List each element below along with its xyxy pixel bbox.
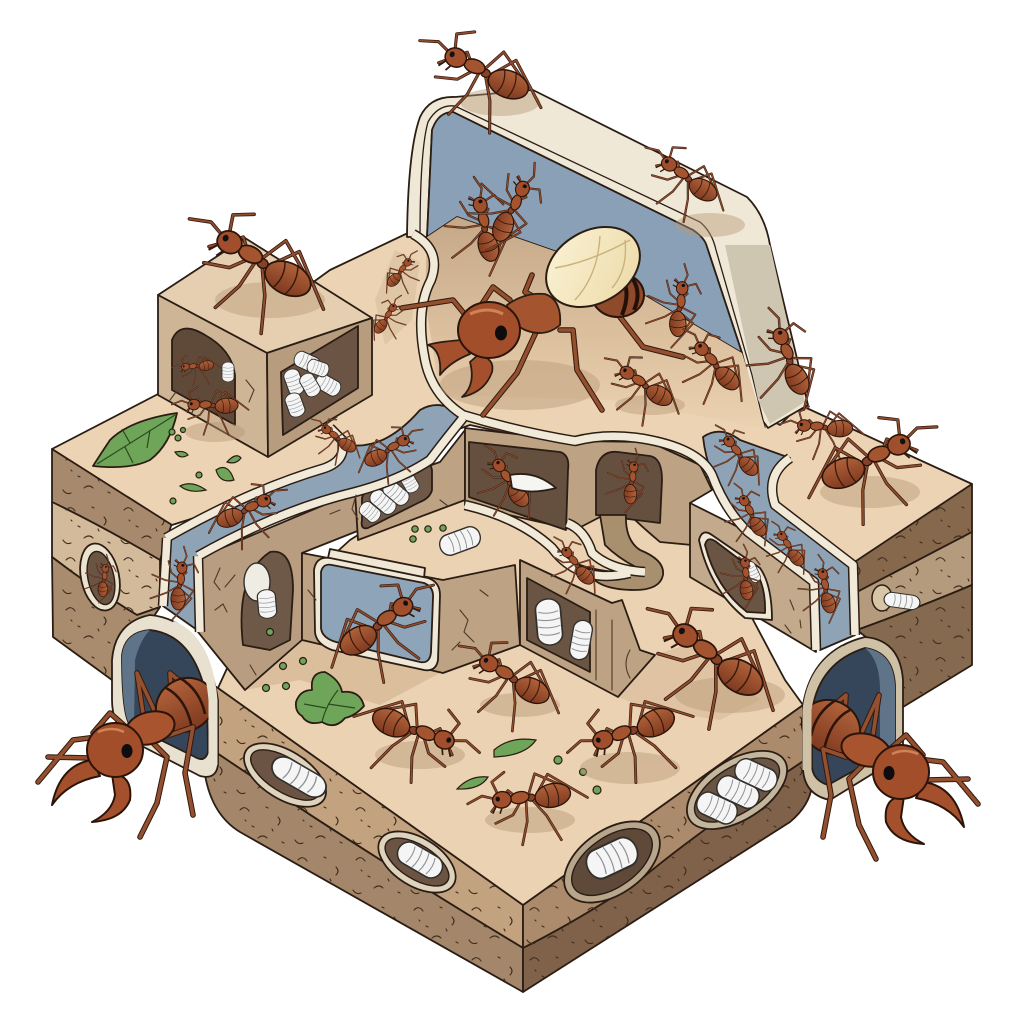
wall cracks xyxy=(308,495,448,600)
ant: wall end xyxy=(725,298,837,425)
earthen wall: back cells xyxy=(465,428,712,545)
ant: cube top xyxy=(158,190,347,353)
ant: floor large xyxy=(611,581,801,752)
left exit tunnel xyxy=(38,615,224,837)
ant: burrow xyxy=(532,527,612,608)
connecting tube area xyxy=(375,250,420,345)
queen chamber wall xyxy=(407,90,808,428)
blue chamber back xyxy=(427,112,742,353)
left soil capsule xyxy=(74,540,126,614)
left tunnel xyxy=(163,405,462,632)
ant: floor right xyxy=(557,675,710,807)
front capsule 3 xyxy=(549,805,675,919)
ant: back cell xyxy=(606,448,648,512)
ant: winged cell xyxy=(456,435,551,534)
right tunnel xyxy=(703,432,855,650)
ant: small right platform xyxy=(779,405,865,463)
ivy leaf xyxy=(296,672,364,725)
ant: left tunnel upper two xyxy=(347,416,437,493)
upper platform surface xyxy=(52,232,972,565)
soil block side faces xyxy=(52,449,972,992)
cube left cell xyxy=(172,329,235,425)
side peg larva xyxy=(872,585,921,611)
ant shadows xyxy=(185,88,920,833)
ant: left tunnel middle xyxy=(198,473,301,558)
ant: right tunnel three xyxy=(750,514,820,586)
ant: top of wall xyxy=(398,15,558,147)
left soldier ant xyxy=(38,706,193,837)
ant: floor left xyxy=(337,675,490,807)
earthen wall: long left xyxy=(198,492,360,690)
larva niche xyxy=(242,552,293,650)
earthen wall: right with lens cell xyxy=(690,503,816,652)
ant: side capsule xyxy=(84,554,116,603)
right soldier ant xyxy=(823,728,978,859)
queen mandibles xyxy=(428,340,470,375)
lower floor surface xyxy=(218,470,803,905)
ant: right tunnel one xyxy=(692,415,777,500)
queen egg xyxy=(532,211,654,323)
queen thorax xyxy=(507,294,560,333)
earthen wall: window section xyxy=(302,549,520,673)
ant: wall right xyxy=(623,131,741,236)
ant: tube one xyxy=(374,244,434,304)
front capsule 4 xyxy=(674,735,800,845)
loose larva on floor xyxy=(437,524,483,558)
ant: lens cell xyxy=(715,542,767,612)
wing xyxy=(510,474,556,492)
right soldier abdomen xyxy=(792,689,879,765)
ant: chamber floor xyxy=(585,342,694,438)
ant: chamber wall one xyxy=(431,171,523,285)
ant: tube two xyxy=(360,289,420,350)
worker ants xyxy=(84,15,960,857)
ant: chamber right upper xyxy=(646,264,701,348)
S-shaped burrow shading xyxy=(570,515,663,590)
ant: right tunnel four xyxy=(788,550,852,629)
left tunnel rim front xyxy=(172,625,213,765)
glass-blue cell xyxy=(314,558,440,670)
cube right cell xyxy=(281,326,358,435)
cube larvae xyxy=(222,349,343,419)
earthen wall: pupae cell xyxy=(520,560,655,697)
small leaves and seeds xyxy=(169,428,601,794)
right exit tunnel xyxy=(792,637,978,859)
ant: cube cell xyxy=(170,350,223,390)
ant: chamber wall two xyxy=(458,147,553,262)
ant: floor front xyxy=(463,756,595,857)
niche larvae xyxy=(244,563,277,619)
ant: floor centre xyxy=(436,625,576,746)
ant: right platform xyxy=(791,400,960,539)
queen abdomen xyxy=(592,273,644,317)
queen ant xyxy=(402,211,683,415)
cube chamber xyxy=(158,238,372,457)
ant: left tunnel vertical xyxy=(150,547,198,620)
left soldier abdomen xyxy=(137,667,224,743)
front capsule 2 xyxy=(368,819,466,905)
larvae cell in tunnel wall xyxy=(355,430,465,540)
ant: right tunnel two xyxy=(708,476,785,558)
queen head xyxy=(458,302,520,358)
ant: chamber right lower xyxy=(655,316,763,422)
cream rim bands xyxy=(163,234,855,650)
ant: window cell xyxy=(309,563,463,701)
chamber floor xyxy=(425,217,765,428)
floor shadows xyxy=(245,640,760,720)
front capsule 1 xyxy=(233,730,337,820)
big leaf xyxy=(93,413,177,467)
ant: left tunnel upper one xyxy=(298,409,371,474)
right tunnel rim front xyxy=(807,650,845,770)
ant: under cube xyxy=(170,383,251,439)
